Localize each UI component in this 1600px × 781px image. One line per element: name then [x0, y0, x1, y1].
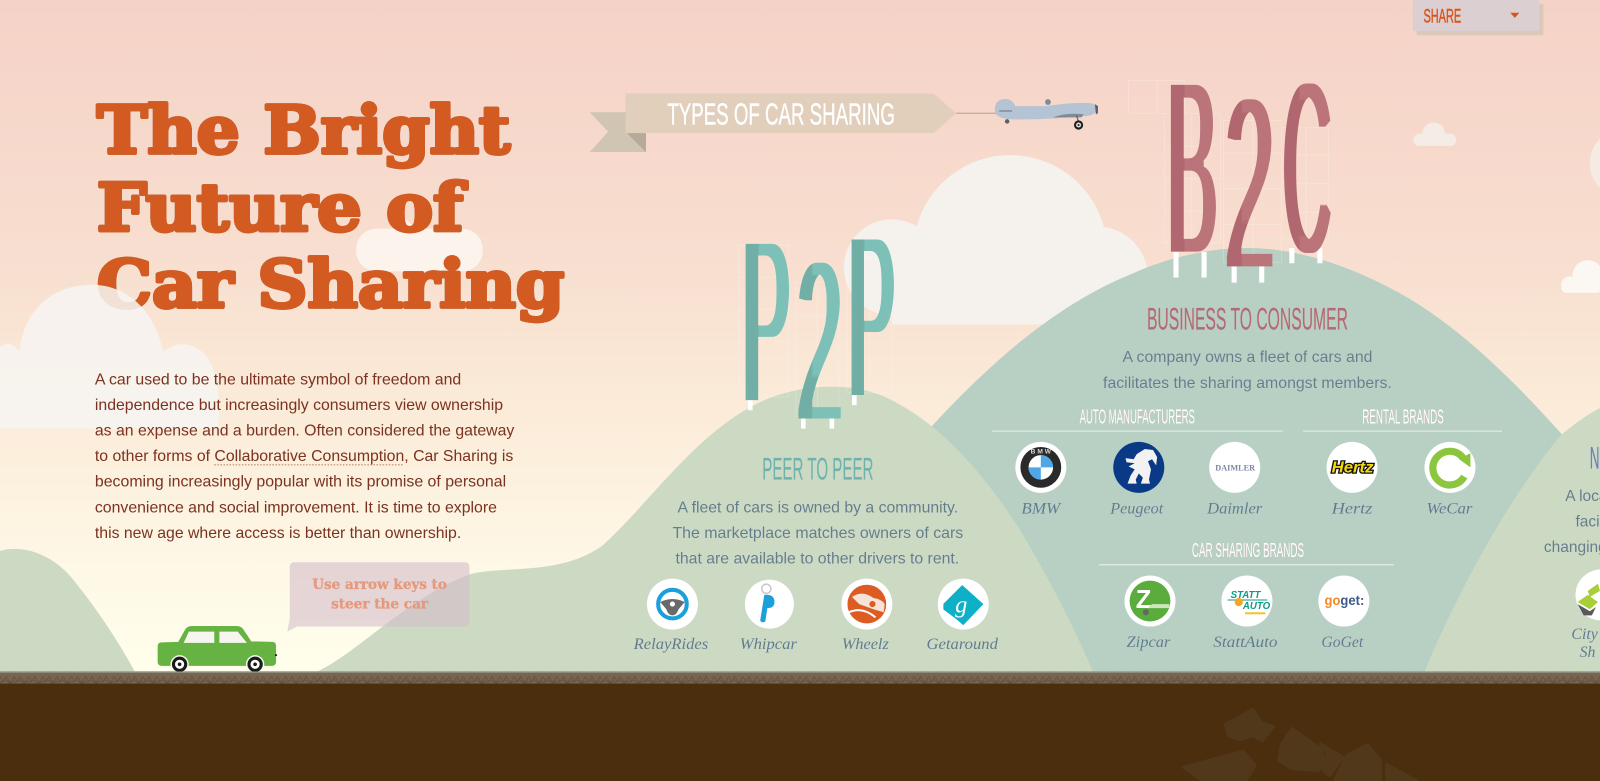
- logo: city car share: [1576, 569, 1600, 620]
- callout: arrow keys hint: steer the car: [331, 597, 429, 613]
- logo: Zipcar: Z: [1136, 586, 1151, 614]
- brand names: business to consumer: Daimler: [1206, 500, 1263, 517]
- brand names: peer to peer: Getaround: [927, 636, 998, 653]
- brand name: city car share: City: [1571, 626, 1599, 643]
- section: business to consumer: BUSINESS TO CONSUMER: [1147, 301, 1348, 337]
- sign: P2P: [739, 186, 895, 471]
- description: peer to peer: A fleet of cars is owned by a community.: [678, 499, 958, 516]
- cloud: large centre: [844, 155, 1147, 324]
- logo: Getaround: [938, 579, 989, 630]
- logo: Wheelz: [841, 579, 892, 630]
- logo: WeCar: [1424, 442, 1476, 493]
- logo: Daimler: [1209, 442, 1260, 493]
- section: business to consumer: [992, 301, 1502, 651]
- description: business to consumer: facilitates the sharing amongst members.: [1103, 375, 1392, 392]
- brand names: business to consumer: WeCar: [1427, 500, 1473, 517]
- brand names: business to consumer: Hertz: [1330, 500, 1372, 517]
- ground: road strip: [0, 671, 1600, 684]
- callout: arrow keys hint: Use arrow keys to: [312, 577, 447, 593]
- intro paragraph: A car used to be the ultimate symbol of freedom and: [95, 372, 461, 389]
- intro paragraph: to other forms of Collaborative Consumption, Car Sharing is: [95, 448, 514, 465]
- intro paragraph: convenience and social improvement. It is time to explore: [95, 499, 497, 516]
- section: neighbourhood (cut off at page edge): [1544, 439, 1600, 661]
- brand names: peer to peer: Wheelz: [842, 636, 889, 653]
- logo: Whipcar: [745, 580, 794, 629]
- tow rope: [956, 112, 1005, 114]
- icon: airplane: [995, 99, 1098, 130]
- logo: BMW: BMW: [1031, 449, 1052, 456]
- brand names: business to consumer: [1021, 500, 1473, 651]
- description: peer to peer: [672, 499, 964, 567]
- brand names: peer to peer: Whipcar: [740, 636, 798, 653]
- ground: soil: [0, 684, 1600, 781]
- brand names: business to consumer: StattAuto: [1213, 634, 1278, 651]
- cloud: large left: [0, 285, 219, 429]
- sign: B2C: C: [1284, 31, 1331, 307]
- brand names: peer to peer: [633, 636, 998, 653]
- title: Future of: [97, 171, 467, 247]
- section: business to consumer: AUTO MANUFACTURERS: [1080, 406, 1195, 428]
- section: peer to peer: [633, 451, 998, 653]
- intro paragraph: [95, 372, 515, 542]
- logo: StattAuto: [1221, 576, 1272, 627]
- description: peer to peer: that are available to other drivers to rent.: [676, 550, 959, 567]
- intro paragraph: independence but increasingly consumers view ownership: [95, 397, 503, 414]
- logo: Hertz: Hertz: [1332, 459, 1374, 476]
- hill: far left: [0, 549, 135, 671]
- sign: B2C: [1129, 29, 1331, 323]
- sign: B2C: 2: [1226, 46, 1274, 323]
- brand names: business to consumer: GoGet: [1321, 634, 1364, 651]
- logo: Getaround: g: [955, 591, 967, 618]
- sign: B2C: B: [1168, 29, 1217, 309]
- section: business to consumer: RENTAL BRANDS: [1362, 406, 1444, 428]
- logo: BMW: [1015, 442, 1066, 493]
- logo: StattAuto: STATT: [1231, 590, 1261, 601]
- cloud: right edge small: [1561, 260, 1600, 293]
- cloud: far right edge: [1590, 129, 1600, 198]
- share button: SHARE: [1423, 5, 1461, 27]
- sign: P2P: 2: [797, 211, 842, 471]
- logo: Zipcar: [1124, 576, 1176, 627]
- logo: GoGet: [1318, 576, 1369, 627]
- title: The Bright: [97, 93, 510, 169]
- sign: P2P: P: [743, 190, 790, 453]
- section: peer to peer: PEER TO PEER: [762, 451, 873, 487]
- fossil: buried in soil: [1184, 709, 1416, 781]
- logo: Daimler: DAIMLER: [1215, 463, 1255, 472]
- cloud: small upper right: [1413, 122, 1456, 146]
- share button: [1413, 0, 1543, 35]
- banner: types of car sharing: [590, 93, 956, 152]
- title: Car Sharing: [97, 247, 564, 323]
- brand names: peer to peer: RelayRides: [633, 636, 708, 653]
- description: business to consumer: A company owns a fleet of cars and: [1122, 349, 1372, 366]
- logo: StattAuto: AUTO: [1242, 601, 1271, 612]
- intro paragraph: becoming increasingly popular with its promise of personal: [95, 474, 506, 491]
- brand names: business to consumer: Peugeot: [1109, 500, 1164, 517]
- logo: RelayRides: [647, 579, 698, 630]
- brand names: business to consumer: BMW: [1021, 500, 1062, 517]
- hill: peer to peer: [317, 387, 1093, 671]
- description: neighbourhood: [1544, 488, 1600, 556]
- banner: types of car sharing: TYPES OF CAR SHARING: [667, 97, 895, 131]
- logo: Hertz: [1327, 442, 1378, 493]
- section: business to consumer: CAR SHARING BRANDS: [1192, 540, 1304, 562]
- intro paragraph: this new age where access is better than ownership.: [95, 525, 461, 542]
- hill: neighbourhood: [1424, 408, 1600, 671]
- hill: business to consumer: [918, 248, 1600, 671]
- sign: P2P: P: [849, 186, 895, 448]
- callout: arrow keys hint: [287, 562, 469, 632]
- cloud: behind title: [356, 219, 483, 271]
- description: peer to peer: The marketplace matches owners of cars: [672, 525, 964, 542]
- title: [97, 93, 564, 323]
- brand names: business to consumer: Zipcar: [1127, 634, 1171, 651]
- logo: Peugeot: [1113, 442, 1164, 493]
- description: business to consumer: [1103, 349, 1392, 392]
- brand name: city car share: Sh: [1580, 644, 1595, 661]
- brand name: city car share: [1571, 626, 1599, 661]
- intro paragraph: as an expense and a burden. Often considered the gateway: [95, 423, 515, 440]
- icon: green car: [158, 627, 277, 673]
- logo: GoGet: goget:: [1324, 593, 1364, 609]
